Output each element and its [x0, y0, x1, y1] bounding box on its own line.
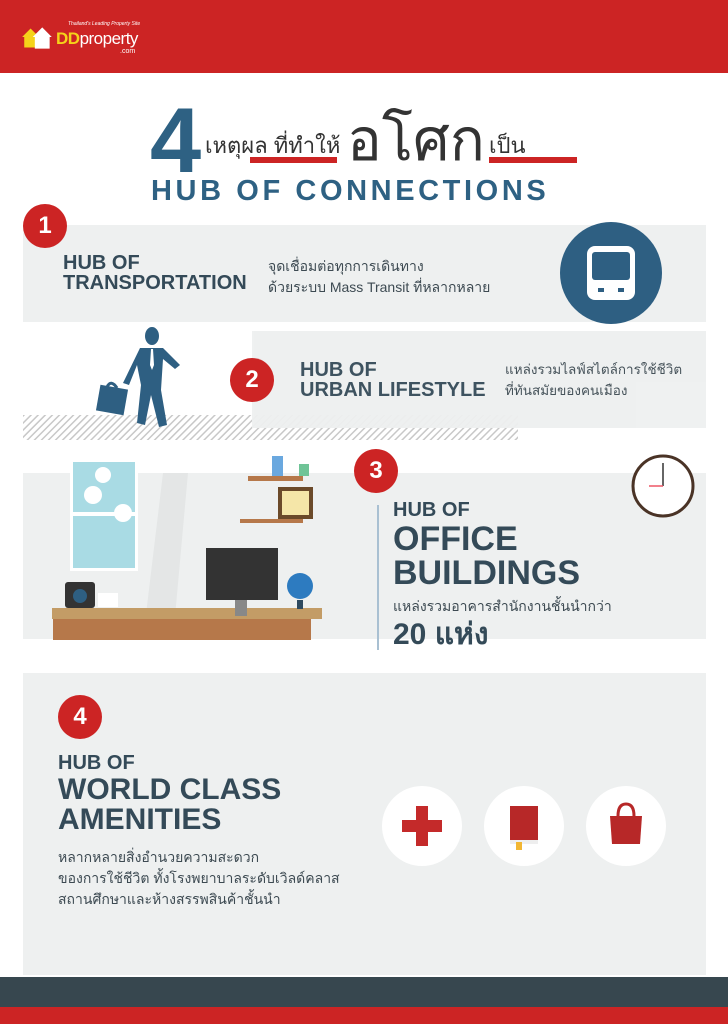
text 1 [268, 256, 490, 295]
icon: hospital cross [382, 786, 462, 866]
icon: book [484, 786, 564, 866]
footer [0, 977, 728, 1024]
title [150, 90, 577, 207]
text 4: สถานศึกษาและห้างสรรพสินค้าชั้นนำ [58, 891, 281, 907]
panel 3: office buildings [23, 473, 706, 639]
icon: clock [632, 454, 694, 518]
number 3: 3 [369, 457, 383, 484]
number 4: 4 [73, 703, 87, 730]
heading 1 [63, 252, 247, 294]
text 2 [505, 362, 682, 398]
heading 4: HUB OF [58, 752, 135, 774]
number 2: 2 [245, 366, 259, 393]
icon: businessman [96, 327, 180, 427]
text 3: แหล่งรวมอาคารสำนักงานชั้นนำกว่า [393, 598, 612, 614]
text 2: แหล่งรวมไลฟ์สไตล์การใช้ชีวิต [505, 362, 682, 377]
heading 2: URBAN LIFESTYLE [300, 379, 486, 401]
text 1: จุดเชื่อมต่อทุกการเดินทาง [268, 258, 424, 274]
number 2 [230, 358, 274, 402]
panel 2: urban lifestyle [252, 331, 706, 428]
figure: 20: 20 แห่ง [393, 618, 488, 651]
heading 3: BUILDINGS [393, 554, 580, 592]
office illustration [52, 456, 322, 640]
panel 4: amenities [23, 673, 706, 975]
heading 2 [300, 359, 486, 401]
heading 3: HUB OF [393, 499, 470, 521]
text 1: ด้วยระบบ Mass Transit ที่หลากหลาย [268, 279, 490, 295]
heading 1: HUB OF [63, 252, 140, 274]
divider line [377, 505, 379, 650]
text 2: ที่ทันสมัยของคนเมือง [505, 383, 627, 398]
logo [22, 21, 140, 55]
heading 4: WORLD CLASS [58, 773, 281, 806]
title: เป็น [489, 133, 526, 158]
text 4: ของการใช้ชีวิต ทั้งโรงพยาบาลระดับเวิลด์คลาส [58, 870, 340, 886]
logo: Thailand's Leading Property Site [68, 21, 140, 27]
heading 1: TRANSPORTATION [63, 272, 247, 294]
heading 3 [393, 499, 580, 592]
heading 4: AMENITIES [58, 803, 221, 836]
header bar [0, 0, 728, 73]
title: อโศก [347, 108, 485, 173]
number 4 [58, 695, 102, 739]
icon: bus [560, 222, 662, 324]
heading 3: OFFICE [393, 520, 518, 558]
icon: shopping bag [586, 786, 666, 866]
number 3 [354, 449, 398, 493]
title: 4 [150, 90, 201, 192]
logo: .com [120, 48, 135, 55]
text 4 [58, 848, 340, 907]
heading 2: HUB OF [300, 359, 377, 381]
title: เหตุผล ที่ทำให้ [205, 133, 340, 158]
title: HUB OF CONNECTIONS [151, 175, 549, 207]
number 1 [23, 204, 67, 248]
logo: DDproperty [56, 29, 138, 48]
number 1: 1 [38, 212, 52, 239]
hatch stripe [23, 415, 518, 440]
text 4: หลากหลายสิ่งอำนวยความสะดวก [58, 849, 259, 865]
panel 1: transportation [23, 225, 706, 322]
heading 4 [58, 752, 281, 836]
